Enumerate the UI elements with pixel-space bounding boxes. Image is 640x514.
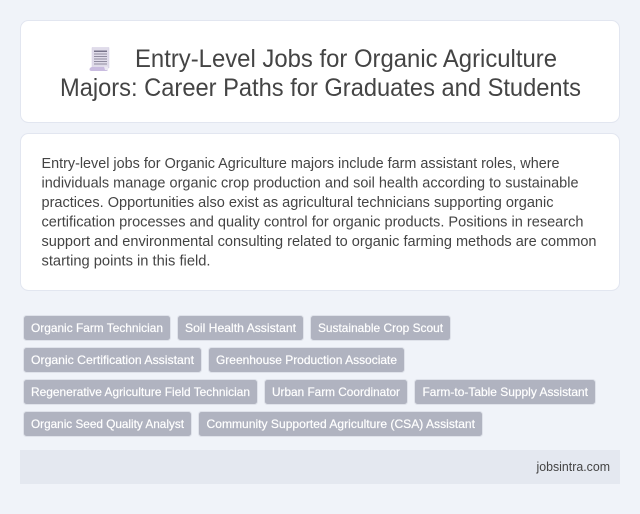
tag: Organic Farm Technician bbox=[24, 316, 170, 340]
tag: Soil Health Assistant: Soil Health Assistant bbox=[185, 321, 297, 335]
job tags bbox=[24, 316, 596, 436]
tag: Regenerative Agriculture Field Technician: Regenerative Agriculture Field Technician bbox=[31, 385, 250, 399]
description text: Entry-level jobs for Organic Agriculture majors include farm assistant roles, where bbox=[42, 156, 560, 172]
footer source: jobsintra.com bbox=[536, 460, 610, 474]
tag: Urban Farm Coordinator: Urban Farm Coordinator bbox=[272, 385, 400, 399]
tag: Greenhouse Production Associate bbox=[208, 348, 404, 372]
description text bbox=[42, 156, 596, 270]
header panel bbox=[20, 20, 620, 122]
description text: certification processes and quality control for organic products. Positions in research bbox=[42, 214, 584, 230]
tag: Soil Health Assistant bbox=[178, 316, 304, 340]
tag: Sustainable Crop Scout: Sustainable Crop Scout bbox=[318, 321, 444, 335]
footer bbox=[20, 450, 620, 484]
tag: Community Supported Agriculture (CSA) Assistant: Community Supported Agriculture (CSA) Assistant bbox=[206, 417, 476, 431]
tag: Urban Farm Coordinator bbox=[264, 380, 408, 404]
panel: description bbox=[20, 134, 620, 290]
icon: scroll document bbox=[90, 48, 109, 71]
tag: Farm-to-Table Supply Assistant: Farm-to-Table Supply Assistant bbox=[422, 385, 589, 399]
tag: Sustainable Crop Scout bbox=[310, 316, 450, 340]
tag: Organic Seed Quality Analyst bbox=[24, 412, 192, 436]
description text: support and environmental consulting related to organic farming methods are common bbox=[42, 234, 596, 250]
title: Majors: Career Paths for Graduates and Students bbox=[60, 74, 581, 102]
tag: Regenerative Agriculture Field Technician bbox=[24, 380, 258, 404]
title bbox=[60, 45, 581, 102]
title: Entry-Level Jobs for Organic Agriculture bbox=[135, 45, 557, 73]
description text: individuals manage organic crop production and soil health according to sustainable bbox=[42, 176, 578, 192]
tag: Organic Certification Assistant bbox=[24, 348, 202, 372]
tag: Organic Farm Technician: Organic Farm Technician bbox=[31, 321, 163, 335]
tag: Community Supported Agriculture (CSA) Assistant bbox=[198, 412, 482, 436]
tag: Organic Seed Quality Analyst: Organic Seed Quality Analyst bbox=[31, 417, 185, 431]
description text: starting points in this field. bbox=[42, 254, 210, 270]
tag: Farm-to-Table Supply Assistant bbox=[414, 380, 596, 404]
description text: practices. Opportunities also exist as agricultural technicians supporting organic bbox=[42, 195, 554, 211]
tag: Organic Certification Assistant: Organic Certification Assistant bbox=[31, 353, 195, 367]
tag: Greenhouse Production Associate: Greenhouse Production Associate bbox=[216, 353, 397, 367]
